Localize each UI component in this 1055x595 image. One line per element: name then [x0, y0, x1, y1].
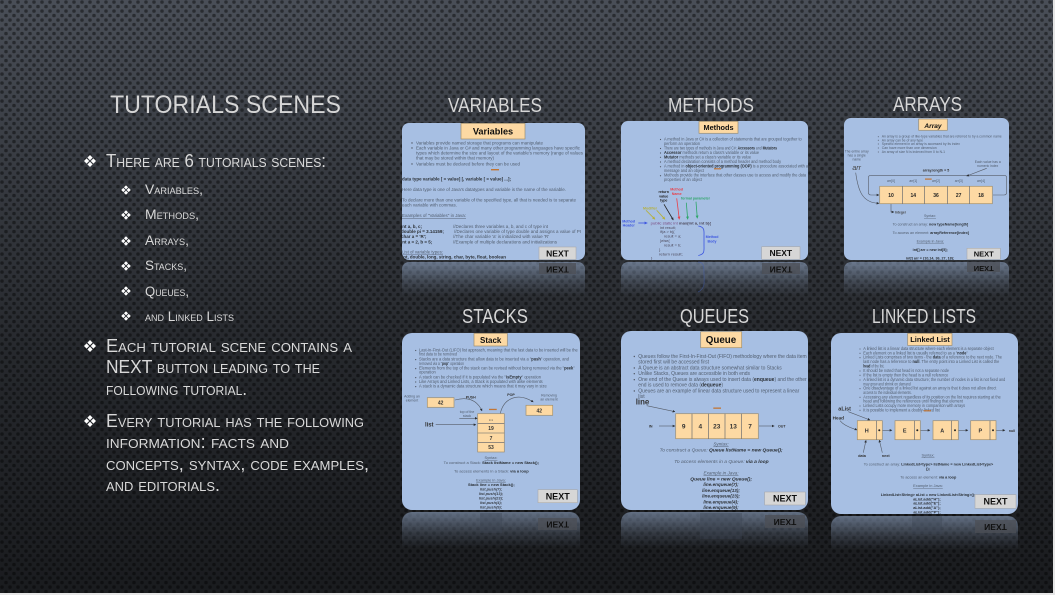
- bullet text: access to the individual elements.: [863, 390, 912, 395]
- bullet text: last node has a reference to null. The entry point into a Linked List is called the: [863, 359, 1000, 364]
- syntax text: list.push(23);: [479, 495, 504, 500]
- diagram labels: Body: [708, 240, 716, 244]
- bullet text: head of the list.: [863, 364, 884, 369]
- declaration text: To declare more than one variable of the specified type, all that is needed is to separate: [402, 197, 576, 202]
- bullet text: head and following the references until finding that element: [863, 399, 964, 404]
- reflection: methods: [621, 262, 808, 296]
- stack cells: 53: [488, 445, 494, 451]
- code sample: if(a > b){: [660, 229, 675, 234]
- panel: queues: line: [636, 398, 650, 406]
- stack cells: [478, 414, 504, 452]
- title box: Methods: [704, 123, 734, 132]
- reflection: variables: NEXT: [546, 264, 570, 274]
- declaration text: data type variable [ = value] [, variable [ = value] ...];: [402, 176, 511, 182]
- syntax text: line.enqueue(23);: [702, 494, 740, 498]
- queue arrows and labels: [649, 424, 786, 428]
- syntax text: To construct an array: LinkedList<type> listName = new LinkedList<type>: [864, 462, 994, 466]
- diagram labels: Method: [622, 220, 635, 224]
- bullet: next button: [84, 336, 352, 399]
- array cells: 36: [933, 193, 939, 199]
- diagram labels: Each value has a: [975, 160, 1001, 164]
- panel: stacks: list: [425, 422, 434, 428]
- title box: Stack: [480, 336, 502, 345]
- diagram labels: Method: [706, 235, 718, 239]
- code examples: char a = 'R';: [401, 234, 427, 239]
- head labels: data: [858, 454, 867, 458]
- stack cells: 19: [488, 426, 494, 432]
- code sample: [651, 220, 712, 260]
- bullet text: types which determine the size and layout of the variable's memory (range of values: [416, 150, 584, 156]
- next button: [539, 247, 576, 259]
- syntax text: aList.add("E");: [913, 501, 941, 506]
- queue cells: 7: [748, 424, 752, 431]
- panel: arrays: arr: [852, 165, 862, 172]
- bullet text: An array can be of any type: [882, 138, 923, 142]
- queue cells: 23: [713, 424, 721, 431]
- heading: linked lists: LINKED LISTS: [872, 306, 976, 328]
- bullet text: Mutator methods set a class's variable or its value: [664, 154, 751, 159]
- stack cells: 7: [490, 436, 493, 442]
- bullet text: A method declaration consists of a method header and method body: [664, 159, 782, 164]
- next button: NEXT: [769, 248, 793, 258]
- text block: bullet list: [84, 151, 369, 495]
- diagram labels: Name: [672, 192, 682, 196]
- bullet text: Queues follow the First-In-First-Out (FIFO) methodology where the data item: [638, 354, 807, 360]
- queue cells: 13: [730, 424, 737, 431]
- diagram labels: formal parameter: [681, 196, 711, 200]
- list nodes: A: [940, 428, 944, 434]
- sub-list of scenes: Queues,: [145, 284, 189, 299]
- sub-list of scenes: and Linked Lists: [145, 309, 234, 324]
- bullet text: list: [638, 394, 645, 400]
- bullet text: A Queue is an abstract data structure somewhat similar to Stacks: [638, 365, 782, 371]
- next button: NEXT: [983, 496, 1008, 506]
- syntax text: Example in Java:: [704, 470, 739, 476]
- bracket and arrows: [856, 168, 1007, 212]
- code sample: }else{: [660, 238, 670, 243]
- reflection: variables: [402, 262, 585, 296]
- title: TUTORIALS SCENES: [110, 91, 341, 119]
- bullet text: stored first will be accessed first: [638, 360, 710, 366]
- next button: NEXT: [974, 250, 994, 258]
- bullet text: It should be noted that head is not a separate node: [863, 368, 950, 373]
- bullet text: [878, 135, 1002, 154]
- bullet text: message and an object: [664, 168, 705, 173]
- panel: queues: [621, 331, 808, 510]
- next button: [762, 247, 800, 259]
- title box: [699, 121, 738, 133]
- code examples: //Example of multiple declarations and initializations: [453, 239, 558, 244]
- bullet text: [634, 354, 807, 400]
- code sample: result = b;: [664, 242, 681, 248]
- diagram labels: arr[4]: [977, 179, 985, 183]
- diagram labels: Header: [623, 224, 635, 228]
- declaration text: Here data type is one of Java's datatypes and variable is the name of the variable.: [402, 187, 566, 192]
- bullet text: Specific element in an array is accessed by its index: [882, 142, 960, 146]
- title box: Array: [923, 123, 942, 130]
- diagram labels: return: [659, 190, 669, 194]
- bullet text: first data to be removed: [419, 352, 457, 357]
- bullet: information: information: facts and: [106, 432, 289, 452]
- queue cells: 4: [698, 424, 702, 431]
- bullet text: Can have more than one dimension: [882, 146, 937, 150]
- bullet: information: Every tutorial has the following: [106, 411, 364, 431]
- code examples: double pi = 3.14159;: [401, 229, 444, 234]
- list nodes: E: [903, 428, 907, 434]
- syntax text: list.push(7);: [480, 486, 503, 491]
- panel: linked lists: [831, 333, 1018, 514]
- diagram labels: [622, 188, 718, 244]
- syntax text: [660, 442, 783, 510]
- declaration text: each variable with commas.: [402, 202, 457, 208]
- diagram labels: element: [406, 398, 418, 402]
- bullet text: Accessor methods return a class's variable or its value: [664, 150, 759, 155]
- reflection: linked lists: NEXT: [984, 522, 1008, 532]
- syntax text: Example in Java:: [917, 240, 944, 244]
- code examples: //The char variable 'a' is initialized with value 'R': [453, 234, 549, 239]
- bullet text: A stack can be checked if it is populated via the "isEmpty" operation: [419, 375, 542, 380]
- title box: Linked List: [910, 335, 950, 344]
- syntax text: To construct a Stack: Stack listName = new Stack();: [444, 460, 539, 465]
- panel: arrays: array.length = 5: [923, 168, 949, 172]
- syntax text: To construct a Queue: Queue listName = new Queue();: [660, 448, 783, 452]
- bullet text: Each variable in Java or C# and many other programming languages have specific: [416, 146, 581, 150]
- reflection: arrays: [844, 262, 1009, 296]
- code sample: result = a;: [664, 234, 681, 238]
- bullet text: Variables must be declared before they can be used: [416, 162, 520, 166]
- next button: NEXT: [773, 493, 797, 503]
- syntax text: line.enqueue(9);: [703, 505, 739, 510]
- bullet text: There are two types of methods in Java and C#: Accessors and Mutators: [664, 146, 777, 151]
- panel: stacks: PUSH: [466, 396, 476, 400]
- syntax text: int[] arr = new int[5];: [913, 248, 948, 252]
- syntax text: [893, 214, 969, 260]
- list nodes: H: [865, 428, 869, 434]
- syntax text: Example in Java:: [913, 483, 943, 488]
- bullet text: removed via a "pop" operation: [419, 361, 464, 366]
- code examples: int a = 2, b = 5;: [401, 239, 433, 244]
- bullet text: Last-In-First-Out (LIFO) list approach, meaning that the last data to be inserted will be the: [419, 348, 578, 353]
- diagram labels: type: [660, 199, 667, 203]
- diagram arrows: [638, 198, 704, 256]
- syntax text: aList.add("H");: [913, 496, 941, 501]
- syntax text: Stack line = new Stack();: [468, 482, 515, 487]
- heading: stacks: STACKS: [462, 306, 528, 328]
- reflection: queues: [621, 512, 808, 548]
- bullet text: A linked list is a dynamic data structure; the number of nodes in a list is not fixed and: [863, 377, 1006, 382]
- bullet text: An array of size N is indexed from 0 to N-1: [882, 150, 945, 154]
- syntax text: Example in Java:: [476, 477, 506, 482]
- code sample: }: [659, 247, 661, 252]
- diagram labels: top of the: [460, 410, 474, 414]
- code sample: int result;: [660, 225, 676, 230]
- code examples: //Declares three variables a, b, and c of type int: [453, 224, 549, 229]
- declaration text: [402, 176, 576, 218]
- diagram labels: arr[1]: [909, 179, 917, 183]
- bullet text: properties of an object: [664, 177, 703, 182]
- reflection: stacks: NEXT: [546, 520, 570, 530]
- next button: NEXT: [546, 492, 570, 502]
- code examples: int a, b, c;: [401, 224, 423, 229]
- bullet text: Variables provide named storage that programs can manipulate: [416, 140, 543, 146]
- array cells: 10: [888, 193, 894, 199]
- bullet: six tutorial scenes: There are 6 tutorials scenes:: [106, 151, 326, 171]
- bullet text: Accessing any element regardless of its position on the list requires starting at the: [863, 394, 1001, 399]
- diagram labels: Adding an: [404, 394, 420, 398]
- bullet text: Methods provide the interface that other classes use to access and modify the data: [664, 173, 806, 178]
- syntax text: To access elements in a Stack: via a loop: [454, 469, 529, 474]
- diagram labels: Method: [670, 188, 683, 192]
- bullet text: Stacks are a data structure that allow data to be inserted via a "push" operation, and: [419, 357, 570, 362]
- bullet: next button: following tutorial.: [106, 379, 247, 399]
- head labels: [833, 406, 1015, 458]
- code sample: public static int max(int a, int b){: [651, 220, 712, 226]
- array cells: 27: [956, 193, 962, 199]
- value boxes: 42: [537, 408, 542, 414]
- syntax text: Queue line = new Queue();: [690, 476, 752, 482]
- bullet text: may grow and shrink on demand: [863, 381, 911, 386]
- syntax text: To access elements in a Queue: via a loop: [674, 459, 769, 464]
- syntax text: Syntax:: [922, 452, 934, 458]
- reflection: stacks: [402, 512, 580, 548]
- sub-list of scenes: Variables,: [145, 182, 203, 197]
- syntax text: line.enqueue(4);: [703, 499, 739, 504]
- syntax text: int[] arr = {10,14, 36, 27, 18};: [906, 256, 954, 260]
- syntax text: Syntax:: [713, 442, 729, 446]
- queue arrows and labels: IN: [649, 425, 653, 429]
- head labels: null: [1009, 429, 1015, 433]
- array cells: 14: [911, 193, 916, 199]
- bullet: information: [84, 411, 369, 495]
- diagram labels: value: [659, 194, 668, 198]
- bullet text: end is used to remove data (dequeue): [638, 383, 723, 389]
- code sample: }: [651, 256, 653, 260]
- bullet text: Linked Lists occupy more memory in comparison with arrays: [863, 403, 965, 408]
- panel: arrays: [844, 118, 1009, 260]
- list arrows: [840, 412, 1005, 453]
- reflection: queues: NEXT: [774, 517, 797, 527]
- bullet: next button: NEXT button leading to the: [106, 357, 320, 377]
- head labels: aList: [838, 406, 851, 412]
- code examples: List of variable types:: [402, 250, 443, 255]
- diagram labels: The entire array: [845, 150, 869, 154]
- code examples: int, double, long, string, char, byte, float, boolean: [402, 255, 506, 260]
- diagram labels: arr[0]: [887, 179, 895, 183]
- array cells: [880, 186, 992, 204]
- value boxes: [427, 398, 553, 415]
- bullet text: Each element on a linked list is usually referred to as a "node": [863, 350, 968, 355]
- title box: [461, 123, 525, 139]
- panel: methods: [621, 121, 808, 260]
- bullet text: A linked list is a linear data structure where each element is a separate object: [863, 346, 994, 351]
- bullet text: operation: [419, 370, 436, 375]
- code sample: return result;: [659, 252, 683, 256]
- panel: stacks: POP: [507, 393, 515, 397]
- sub-list of scenes: [121, 182, 234, 324]
- syntax text: [864, 452, 994, 514]
- queue cells: [676, 414, 758, 439]
- sub-list of scenes: Methods,: [145, 207, 199, 222]
- bullet text: One end of the Queue is always used to insert data (enqueue) and the other: [638, 377, 807, 383]
- syntax text: aList.add("P");: [913, 509, 941, 514]
- bullet: next button: Each tutorial scene contains a: [106, 336, 352, 356]
- diagram labels: arr[3]: [955, 179, 963, 183]
- title box: [919, 119, 947, 130]
- sub-list of scenes: Stacks,: [145, 258, 187, 273]
- panel: stacks: [402, 333, 580, 510]
- panel: arrays: Integer: [895, 210, 907, 214]
- code examples: //Declares one variable of type double and assigns a value of PI: [454, 229, 581, 234]
- panel: variables: [401, 123, 585, 260]
- reflection: methods: NEXT: [770, 264, 793, 274]
- syntax text: To access an element: arrayReference[index]: [893, 231, 969, 235]
- bullet text: Like Arrays and Linked Lists, a Stack is populated with alike elements: [419, 379, 543, 384]
- syntax text: list.push(4);: [480, 500, 503, 505]
- bullet text: [660, 137, 808, 182]
- array cells: 18: [978, 193, 984, 199]
- bullet: information: and editorials.: [106, 475, 220, 495]
- diagram labels: an element: [540, 398, 558, 402]
- heading: methods: METHODS: [668, 95, 754, 117]
- diagram labels: has a single: [848, 154, 866, 158]
- bullet text: One disadvantage of a linked list against an array is that it does not allow direct: [863, 386, 997, 391]
- sub-list of scenes: Arrays,: [145, 233, 189, 248]
- next button: [765, 492, 805, 505]
- syntax text: Syntax:: [924, 214, 936, 218]
- bullet text: If the list is empty then the head is a null reference: [863, 372, 949, 377]
- declaration text: Examples of "Variables" in Java:: [402, 213, 466, 218]
- title box: Queue: [706, 335, 737, 346]
- bullet text: A method in Java or C# is a collection of statements that are grouped together to: [664, 137, 802, 142]
- title box: [701, 332, 742, 348]
- diagram labels: [404, 394, 558, 418]
- syntax text: To construct an array: new typeName[length]: [893, 222, 968, 226]
- next button: [538, 490, 577, 503]
- diagram labels: Removing: [541, 394, 557, 398]
- syntax text: line.enqueue(7);: [703, 482, 739, 487]
- syntax text: To access an element: via a loop: [900, 474, 957, 480]
- bullet text: Elements from the top of the stack can be revised without being removed via the "peek": [419, 366, 575, 371]
- bullet text: An array is a group of like-type variables that are referred to by a common name: [882, 135, 1002, 139]
- syntax text: list.push(9);: [480, 504, 503, 509]
- bullet text: [859, 346, 1006, 412]
- diagram labels: Modifier: [643, 206, 658, 210]
- syntax text: ();: [926, 466, 930, 471]
- diagram labels: arr[2]: [932, 179, 940, 183]
- diagram labels: stack: [463, 414, 471, 418]
- next button: [967, 248, 1000, 259]
- syntax text: list.push(13);: [479, 491, 504, 496]
- diagram labels: [845, 150, 1001, 183]
- reflection: linked lists: [831, 516, 1018, 550]
- heading: variables: VARIABLES: [448, 95, 542, 117]
- syntax text: Syntax:: [485, 455, 497, 460]
- reflection: arrays: NEXT: [974, 264, 994, 273]
- title box: Variables: [473, 127, 513, 137]
- bullet text: A stack is a dynamic data structure which means that it may vary in size: [419, 384, 547, 389]
- list nodes: P: [978, 428, 982, 434]
- syntax text: aList.add("A");: [913, 505, 941, 510]
- heading: queues: QUEUES: [680, 306, 749, 328]
- stack cells: ...: [489, 416, 494, 422]
- next button: [975, 495, 1016, 508]
- bullet text: Queues are an example of linear data structure used to represent a linear: [638, 388, 800, 394]
- bullet text: [415, 348, 578, 389]
- diagram arrows: [436, 397, 533, 425]
- list nodes: [857, 421, 996, 440]
- diagram labels: name: [852, 158, 861, 162]
- bullet: information: concepts, syntax, code examples,: [106, 454, 369, 474]
- title box: [908, 333, 952, 345]
- queue cells: 9: [682, 424, 686, 431]
- queue arrows and labels: OUT: [778, 425, 786, 429]
- syntax text: LinkedList<String> aList = new LinkedList<String>();: [881, 492, 975, 497]
- bullet text: [411, 140, 584, 166]
- bullet text: Linked Lists comprises of two items - the data of a reference to the next node. The: [863, 355, 1003, 360]
- bullet text: Unlike Stacks, Queues are accessible in both ends: [638, 371, 750, 377]
- title box: [474, 333, 507, 346]
- bullet text: It is possible to implement a doubly-linked list: [863, 407, 940, 412]
- code examples: [401, 224, 581, 260]
- head labels: next: [882, 454, 890, 458]
- bullet text: A method in object-oriented programming (OOP) is a procedure associated with a: [664, 164, 808, 169]
- head labels: Head: [833, 416, 844, 420]
- syntax text: line.enqueue(13);: [702, 488, 740, 493]
- value boxes: 42: [438, 401, 444, 407]
- diagram labels: numeric index: [977, 164, 999, 168]
- bullet text: that may be stored within that memory): [416, 156, 494, 160]
- syntax text: [444, 455, 539, 509]
- heading: arrays: ARRAYS: [893, 94, 962, 116]
- next button: NEXT: [546, 248, 570, 258]
- bullet text: perform an operation: [664, 141, 700, 146]
